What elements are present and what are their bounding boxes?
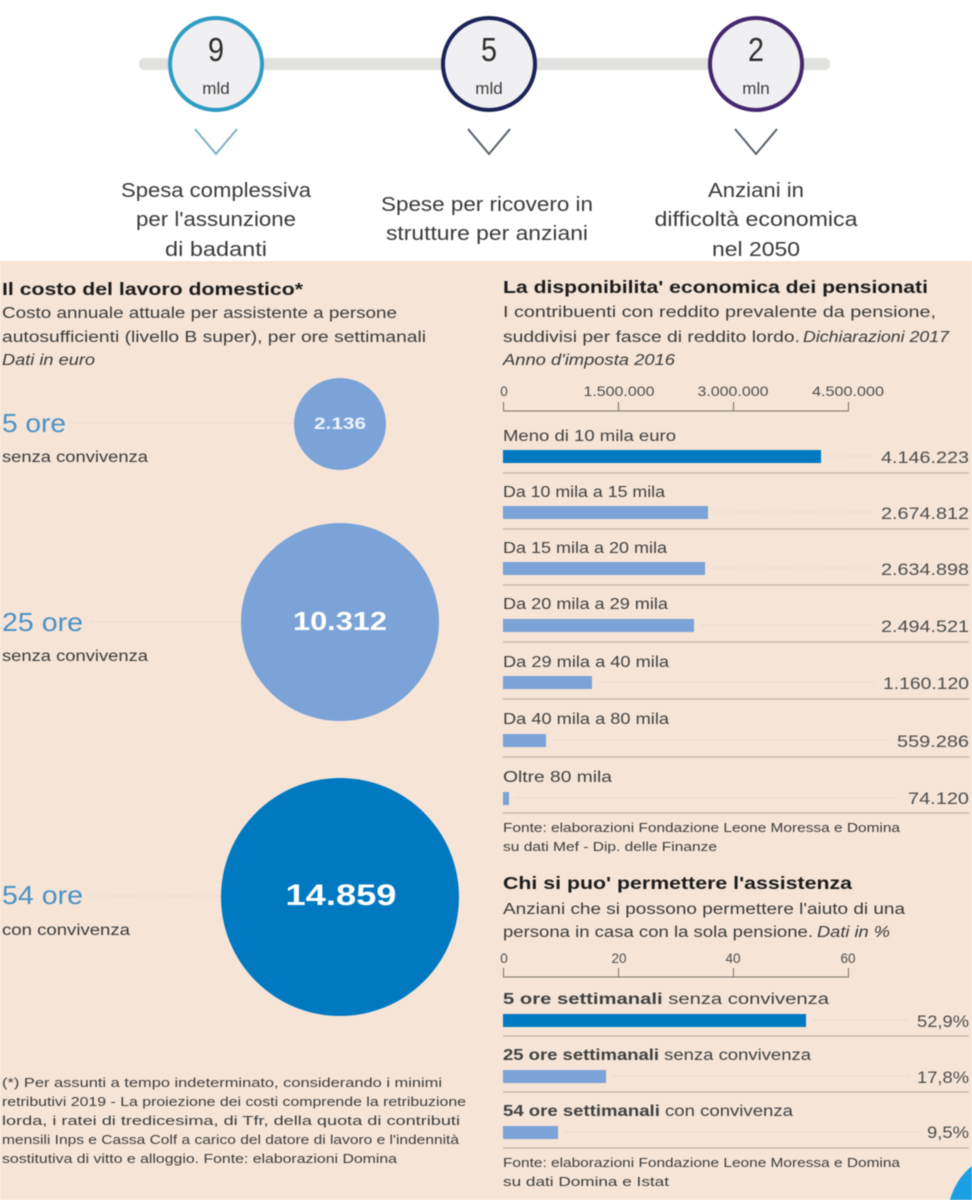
heading: Chi si puo' permettere l'assistenza bbox=[503, 873, 852, 893]
heading: Il costo del lavoro domestico* bbox=[2, 279, 303, 299]
bubble: 5 ore bbox=[2, 378, 386, 470]
footnote: retributivi 2019 - La proiezione dei costi comprende la retribuzione bbox=[2, 1094, 466, 1109]
text: anziani: difficoltà economica bbox=[654, 209, 858, 231]
panel: disponibilità economica dei pensionati bbox=[500, 277, 969, 854]
icon: chevron 3 bbox=[735, 129, 777, 154]
panel: top key figures bbox=[121, 18, 858, 261]
row: 15-20 mila: Da 15 mila a 20 mila bbox=[503, 540, 667, 557]
subheading: I contribuenti con reddito prevalente da pensione, bbox=[503, 304, 936, 321]
subheading: autosufficienti (livello B super), per ore settimanali bbox=[2, 329, 426, 346]
subheading: Anziani che si possono permettere l'aiuto di una bbox=[503, 901, 905, 918]
source bbox=[503, 820, 901, 854]
subheading: persona in casa con la sola pensione. bbox=[503, 924, 813, 941]
row: 20-29 mila: Da 20 mila a 29 mila bbox=[503, 596, 668, 613]
timeline bar bbox=[139, 58, 830, 70]
icon: chevron 1 bbox=[195, 129, 237, 154]
bubble: 54 ore: 14.859 bbox=[286, 879, 396, 912]
figure: 9 mld: mld bbox=[202, 79, 230, 98]
subheading bbox=[503, 901, 905, 941]
figure: 5 mld bbox=[443, 18, 535, 110]
row: 54 ore: 9,5% bbox=[927, 1123, 969, 1142]
axis: 20 bbox=[611, 951, 627, 966]
text: badanti bbox=[121, 180, 312, 261]
text: ricovero: Spese per ricovero in bbox=[381, 194, 593, 216]
subheading: Dati in euro bbox=[2, 352, 95, 369]
subheading: Dati in % bbox=[817, 924, 890, 941]
figure: 9 mld: 9 bbox=[208, 31, 224, 68]
row: 54 ore: 54 ore settimanali con convivenza bbox=[503, 1103, 793, 1120]
row: 5 ore: 5 ore settimanali senza convivenza bbox=[503, 991, 829, 1008]
row: 40-80 mila: Da 40 mila a 80 mila bbox=[503, 711, 669, 728]
row: 10-15 mila: Da 10 mila a 15 mila bbox=[503, 484, 665, 501]
row: 25 ore bbox=[503, 1047, 969, 1092]
axis: 0 bbox=[500, 951, 508, 966]
row: 29-40 mila: Da 29 mila a 40 mila bbox=[503, 654, 669, 671]
text: anziani: nel 2050 bbox=[712, 239, 800, 261]
subheading: suddivisi per fasce di reddito lordo. bbox=[503, 329, 800, 346]
row: 25 ore: 17,8% bbox=[917, 1068, 969, 1087]
row: 15-20 mila bbox=[503, 540, 969, 585]
icon: chevron 2 bbox=[468, 129, 510, 154]
figure: 5 mld: mld bbox=[475, 79, 503, 98]
row: 10-15 mila: 2.674.812 bbox=[881, 504, 969, 523]
bubble: 25 ore: senza convivenza bbox=[2, 648, 148, 665]
axis: 1.500.000 bbox=[584, 384, 654, 399]
figure: 2 mln: 2 bbox=[748, 31, 764, 68]
row: 10-15 mila bbox=[503, 484, 969, 529]
footnote: (*) Per assunti a tempo indeterminato, considerando i minimi bbox=[2, 1075, 442, 1090]
row: meno di 10 mila: Meno di 10 mila euro bbox=[503, 428, 676, 445]
text: anziani bbox=[654, 180, 858, 261]
figure: 5 mld: 5 bbox=[481, 31, 497, 68]
source: Fonte: elaborazioni Fondazione Leone Moressa e Domina bbox=[503, 820, 901, 835]
figure: 2 mln: mln bbox=[742, 79, 770, 98]
row: 5 ore: 52,9% bbox=[917, 1012, 969, 1031]
row: 5 ore bbox=[503, 991, 969, 1036]
source bbox=[503, 1155, 901, 1189]
text: ricovero: strutture per anziani bbox=[386, 223, 588, 245]
subheading: Anno d'imposta 2016 bbox=[502, 352, 675, 369]
bubble: 54 ore: 54 ore bbox=[2, 880, 83, 910]
bubble: 25 ore: 25 ore bbox=[2, 607, 83, 637]
panel: chi si può permettere l'assistenza bbox=[500, 873, 969, 1189]
text: ricovero bbox=[381, 194, 593, 245]
row: oltre 80 mila bbox=[503, 769, 969, 813]
axis: 40 bbox=[725, 951, 741, 966]
footnote: mensili Inps e Cassa Colf a carico del datore di lavoro e l'indennità bbox=[2, 1132, 460, 1147]
source: Fonte: elaborazioni Fondazione Leone Moressa e Domina bbox=[503, 1155, 901, 1170]
axis bbox=[500, 951, 856, 977]
source: su dati Domina e Istat bbox=[503, 1174, 670, 1189]
row: 20-29 mila: 2.494.521 bbox=[881, 617, 969, 636]
row: 29-40 mila: 1.160.120 bbox=[883, 674, 969, 693]
row: 40-80 mila: 559.286 bbox=[897, 732, 969, 751]
footnote: sostitutiva di vitto e alloggio. Fonte: elaborazioni Domina bbox=[2, 1151, 398, 1166]
bubble: 54 ore bbox=[2, 778, 459, 1016]
row: 40-80 mila bbox=[503, 711, 969, 757]
bubble: 5 ore: 5 ore bbox=[2, 408, 66, 438]
row: oltre 80 mila: 74.120 bbox=[908, 789, 969, 808]
axis: 0 bbox=[500, 384, 508, 399]
axis: 4.500.000 bbox=[812, 384, 884, 399]
row: meno di 10 mila bbox=[503, 428, 969, 473]
axis: 60 bbox=[840, 951, 856, 966]
decorative blue corner shape bbox=[950, 1166, 972, 1200]
figure: 2 mln bbox=[710, 18, 802, 110]
subheading bbox=[502, 304, 951, 369]
panel: beige background bbox=[0, 261, 972, 1200]
row: 54 ore bbox=[503, 1103, 969, 1148]
bubble: 25 ore bbox=[2, 523, 439, 721]
text: badanti: per l'assunzione bbox=[136, 209, 296, 231]
source: su dati Mef - Dip. delle Finanze bbox=[503, 839, 717, 854]
bubble: 5 ore: 2.136 bbox=[314, 414, 366, 433]
heading: La disponibilita' economica dei pensionati bbox=[503, 277, 928, 297]
subheading bbox=[2, 305, 426, 369]
bubble: 54 ore: con convivenza bbox=[2, 922, 130, 939]
row: oltre 80 mila: Oltre 80 mila bbox=[503, 769, 612, 786]
text: badanti: di badanti bbox=[165, 239, 267, 261]
panel: costo del lavoro domestico bbox=[2, 279, 466, 1166]
subheading: Dichiarazioni 2017 bbox=[803, 329, 951, 346]
row: 15-20 mila: 2.634.898 bbox=[881, 560, 969, 579]
row: 29-40 mila bbox=[503, 654, 969, 699]
figure: 9 mld bbox=[170, 18, 262, 110]
axis bbox=[500, 384, 884, 411]
text: anziani: Anziani in bbox=[708, 180, 804, 202]
footnote: lorda, i ratei di tredicesima, di Tfr, della quota di contributi bbox=[2, 1113, 460, 1128]
axis: 3.000.000 bbox=[698, 384, 768, 399]
row: meno di 10 mila: 4.146.223 bbox=[881, 448, 969, 467]
row: 20-29 mila bbox=[503, 596, 969, 642]
bubble: 5 ore: senza convivenza bbox=[2, 449, 148, 466]
bubble: 25 ore: 10.312 bbox=[293, 606, 387, 636]
text: badanti: Spesa complessiva bbox=[121, 180, 312, 202]
row: 25 ore: 25 ore settimanali senza convivenza bbox=[503, 1047, 811, 1064]
footnote bbox=[2, 1075, 466, 1166]
subheading: Costo annuale attuale per assistente a persone bbox=[2, 305, 397, 322]
